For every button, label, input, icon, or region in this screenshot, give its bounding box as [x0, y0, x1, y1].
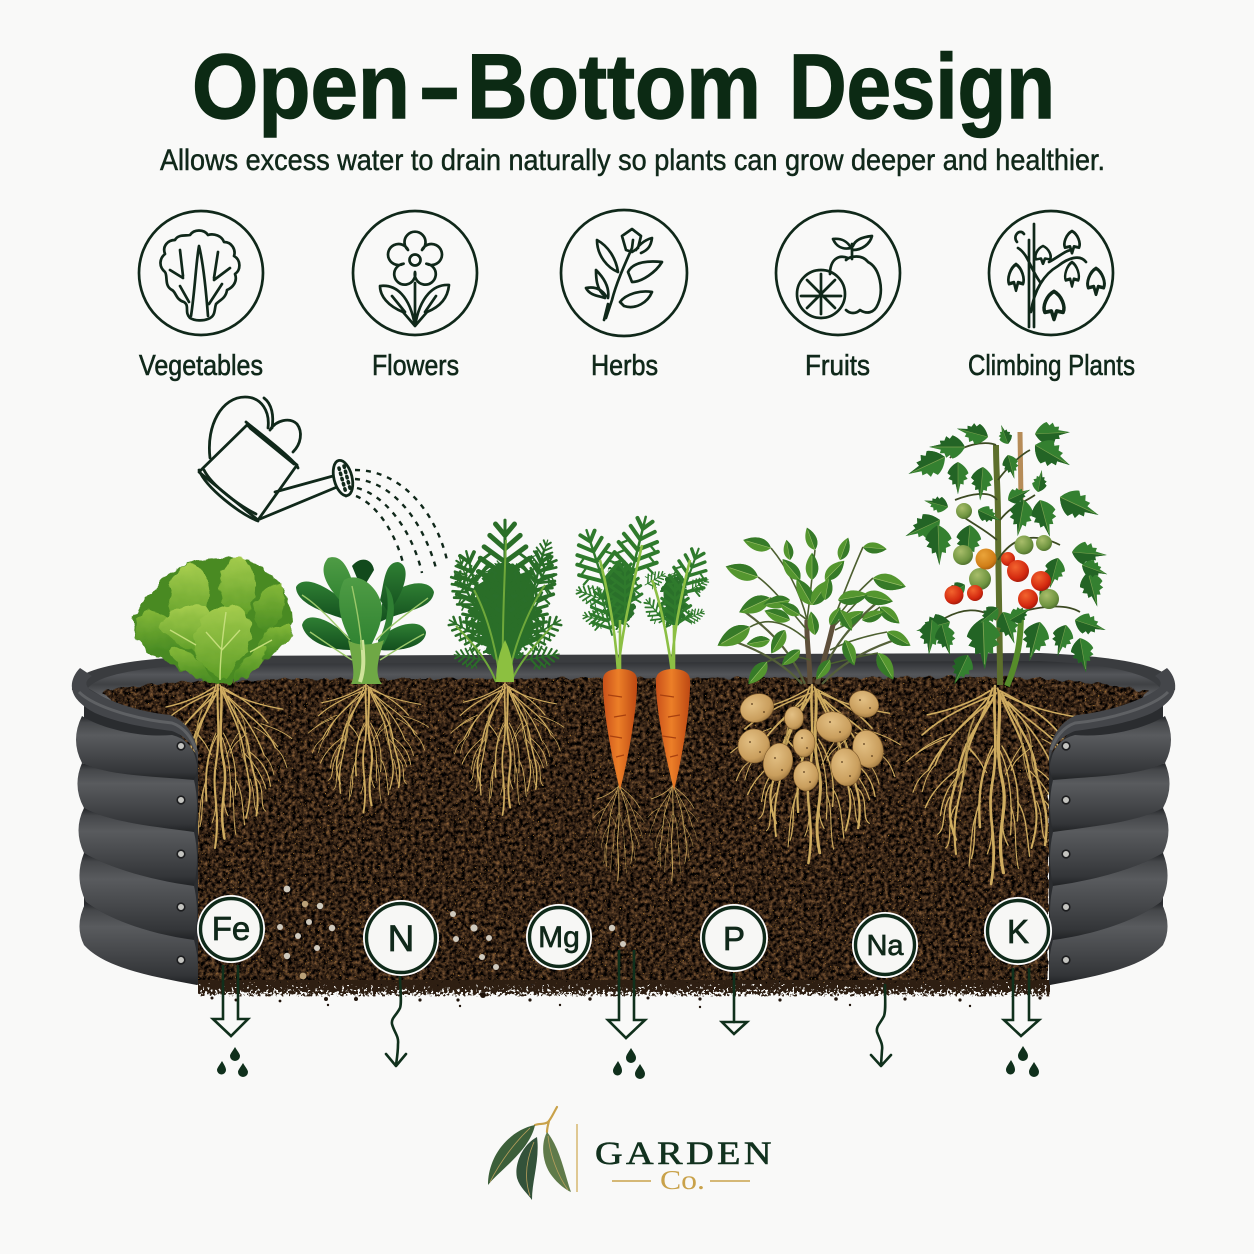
carrot foliage: [567, 512, 716, 639]
plant: lettuce: [133, 556, 293, 848]
plant: potato: [713, 526, 914, 863]
nutrient badge: N: [363, 900, 439, 976]
tomato roots: [907, 686, 1091, 884]
icon: flowers: [353, 211, 477, 335]
logo divider: [576, 1124, 578, 1192]
inner wall: [88, 661, 1160, 700]
icon: vegetables: [139, 211, 263, 335]
tomatoes: [944, 503, 1059, 609]
logo sub-mark: Co.: [660, 1165, 705, 1195]
label: herbs: Herbs: [591, 350, 658, 382]
spinach roots: [308, 684, 429, 813]
tomato leaves: [900, 419, 1110, 689]
carrot foliage mass: [604, 563, 687, 627]
plant: spinach: [296, 557, 434, 813]
title: Open: [192, 36, 410, 138]
label: vegetables: Vegetables: [139, 350, 263, 382]
nutrient arrow: Fe: [213, 965, 248, 1077]
crumbling soil edge: [198, 980, 1050, 1006]
nutrient badge: Na: [852, 912, 918, 978]
right bed wall: [1049, 668, 1175, 985]
nutrient badge: Fe: [197, 895, 265, 963]
nutrient badge: Fe: Fe: [212, 910, 250, 947]
nutrient badge: P: P: [723, 920, 745, 957]
nutrient badge: Mg: Mg: [538, 921, 580, 954]
watering can: [199, 397, 447, 573]
tomato stems: [945, 443, 1080, 686]
potato leaves: [713, 526, 914, 688]
logo wordmark: GARDEN: [595, 1136, 775, 1172]
nutrient badge: K: [984, 897, 1052, 965]
nutrient arrow: K: [1004, 968, 1039, 1077]
potatoes: [736, 686, 887, 791]
frond stems: [456, 540, 552, 682]
icon: fruits: [776, 211, 900, 335]
water drops: [613, 1048, 645, 1079]
feathery fronds: [442, 520, 567, 671]
tomato stake: [1020, 432, 1021, 500]
nutrient arrow: Na: [871, 985, 891, 1066]
lettuce leaves: [133, 556, 293, 683]
nutrient badge: N: N: [388, 918, 414, 959]
icon: herbs: [561, 210, 687, 336]
logo leaves: [488, 1125, 571, 1200]
potato stems: [730, 600, 895, 684]
title: –: [421, 36, 458, 138]
subtitle: Allows excess water to drain naturally so plants can grow deeper and healthier.: [160, 144, 1105, 177]
label: flowers: Flowers: [372, 350, 459, 382]
icon: climbing plants: [989, 211, 1113, 335]
label: climbing plants: Climbing Plants: [968, 350, 1135, 382]
soil pebbles: [277, 886, 626, 979]
nutrient badge: K: K: [1007, 913, 1029, 950]
plant: carrots: [567, 512, 716, 881]
nutrient arrow: P: [722, 974, 747, 1034]
title: Design: [789, 36, 1055, 138]
plant: carrot top: [442, 520, 567, 815]
raised bed interior: [72, 653, 1175, 1008]
back rim: [72, 653, 1175, 700]
nutrient badge: P: [700, 904, 768, 972]
plant: tomato: [900, 419, 1110, 884]
carrot thin roots: [594, 785, 644, 881]
potato roots: [731, 685, 901, 863]
label: fruits: Fruits: [805, 350, 870, 382]
carrot top roots: [451, 683, 564, 815]
soil: [100, 677, 1150, 986]
right carrot: [656, 669, 690, 790]
potato branches: [750, 547, 887, 665]
frond base: [496, 640, 514, 682]
water drops: [1006, 1046, 1039, 1077]
nutrient arrow: N: [386, 975, 406, 1066]
title: Bottom: [467, 36, 761, 138]
logo branch: [535, 1107, 557, 1132]
water drops: [217, 1047, 248, 1077]
nutrient badge: Mg: [526, 904, 592, 970]
lettuce veins: [170, 612, 272, 680]
logo: [488, 1107, 775, 1200]
left bed wall: [72, 668, 198, 985]
dense foliage mass: [475, 562, 535, 662]
spinach leaves: [296, 557, 434, 684]
carrot stalks: [600, 545, 690, 672]
potato eyes: [749, 699, 873, 783]
nutrient badge: Na: Na: [866, 930, 904, 962]
soil crumbs: [210, 992, 1042, 1008]
lettuce roots: [150, 683, 292, 848]
left carrot: [603, 669, 637, 790]
nutrient arrow: Mg: [608, 950, 645, 1079]
logo rules: [612, 1180, 750, 1182]
